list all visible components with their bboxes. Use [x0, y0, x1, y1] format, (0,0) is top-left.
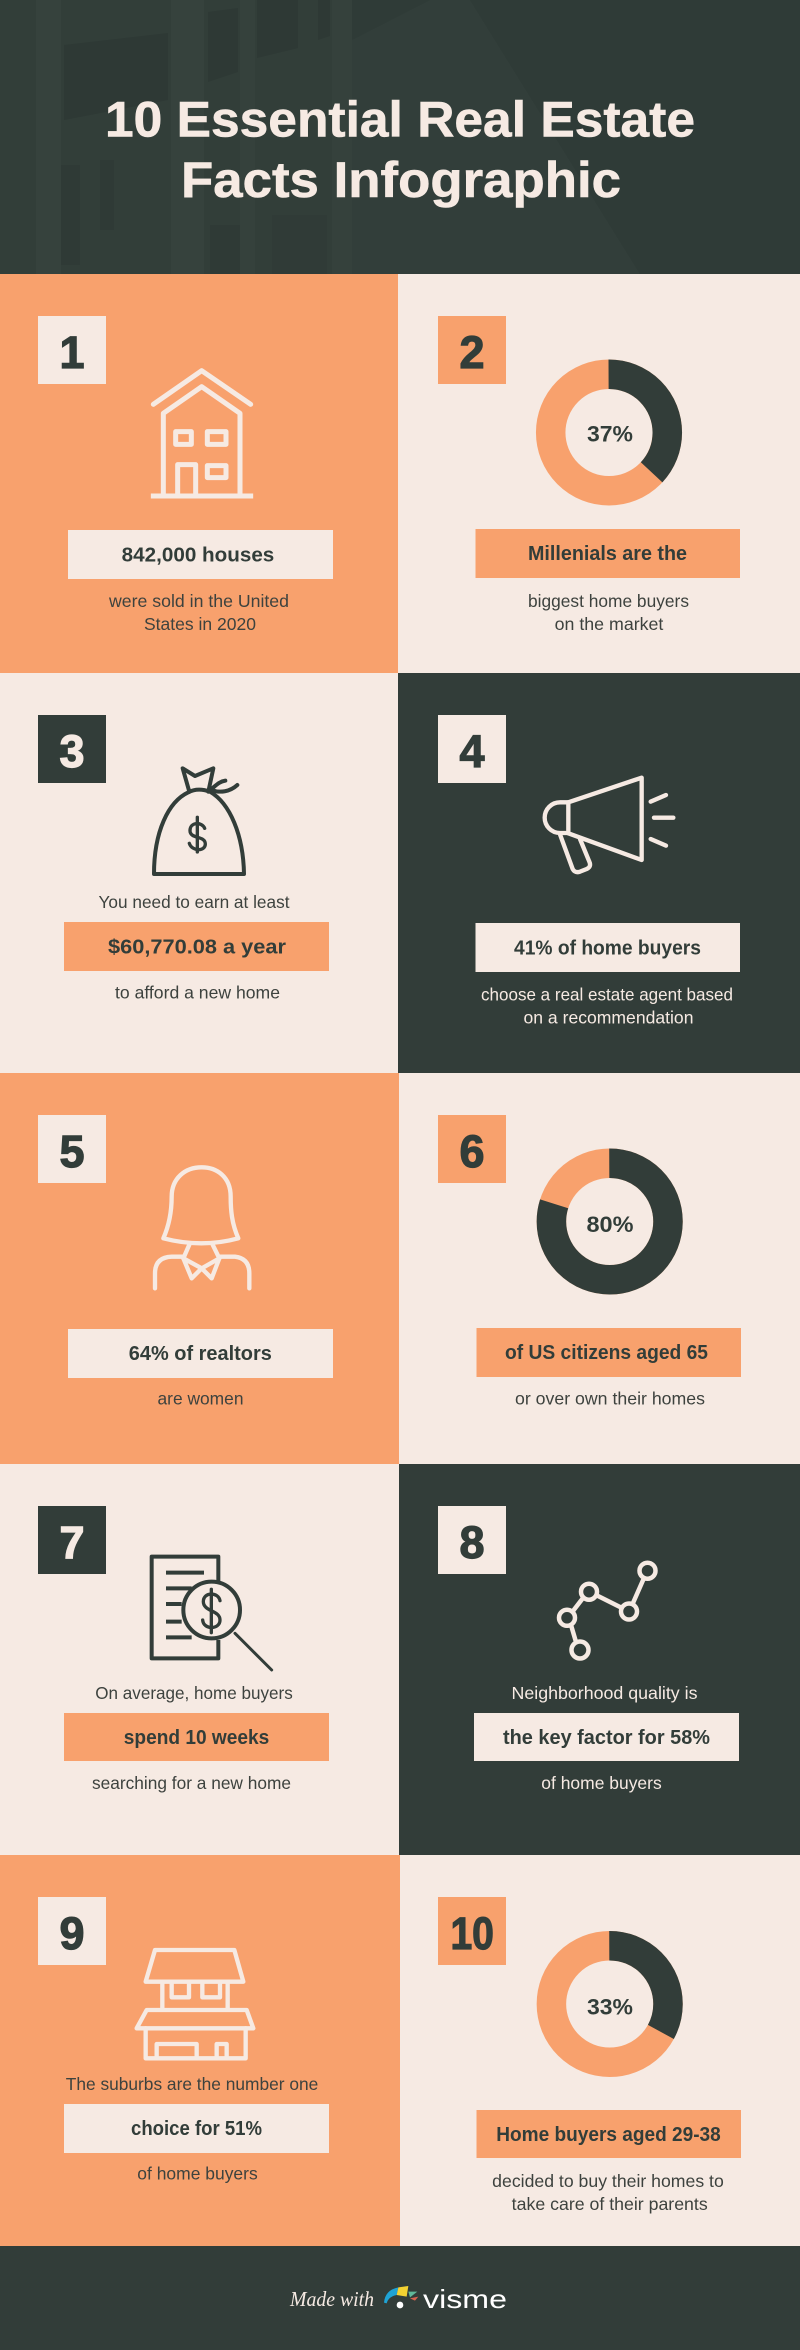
description: on the market: [555, 614, 663, 634]
description: [528, 591, 689, 634]
label: [476, 529, 740, 578]
number 5: 5: [59, 1126, 85, 1177]
donut chart 37%: [551, 374, 667, 491]
description: [481, 985, 733, 1028]
number 2: 2: [459, 327, 485, 378]
label: [476, 2110, 741, 2158]
panel 2: millennials: [398, 274, 800, 673]
label: choice for 51%: [131, 2118, 262, 2140]
icon: suburban house: [137, 1950, 253, 2058]
intro text: Neighborhood quality is: [512, 1683, 698, 1703]
label: of US citizens aged 65: [505, 1342, 708, 1364]
number 10: [438, 1897, 506, 1965]
panel 3: income needed: [0, 673, 398, 1073]
label: [476, 1328, 741, 1377]
number 1: [38, 316, 106, 384]
description: are women: [158, 1389, 244, 1409]
label: the key factor for 58%: [503, 1727, 710, 1749]
description: biggest home buyers: [528, 591, 689, 611]
description: to afford a new home: [115, 983, 280, 1003]
icon: visme logo: [384, 2286, 418, 2308]
icon: money bag: [154, 768, 244, 874]
number 5: [38, 1115, 106, 1183]
number 6: 6: [459, 1126, 485, 1177]
panel 1: houses sold: [0, 274, 398, 673]
description: or over own their homes: [515, 1389, 705, 1409]
label: [474, 1713, 739, 1761]
description: take care of their parents: [512, 2194, 708, 2214]
number 7: 7: [59, 1517, 85, 1568]
panel 10: caring for parents: [400, 1855, 800, 2246]
description: [492, 2171, 724, 2214]
number 6: [438, 1115, 506, 1183]
description: searching for a new home: [92, 1773, 291, 1793]
label: spend 10 weeks: [124, 1727, 269, 1749]
label: [64, 922, 329, 971]
panel 7: search time: [0, 1464, 399, 1855]
donut chart 80%: [551, 1163, 668, 1280]
label: $60,770.08 a year: [108, 937, 286, 959]
number 4: 4: [459, 726, 485, 777]
label: Home buyers aged 29-38: [496, 2124, 721, 2146]
number 3: [38, 715, 106, 783]
donut chart 37%: 37%: [587, 422, 633, 446]
icon: house: [153, 371, 251, 496]
number 7: [38, 1506, 106, 1574]
label: 842,000 houses: [122, 544, 274, 566]
header panel: [0, 0, 800, 274]
description: States in 2020: [144, 614, 256, 634]
number 10: 10: [450, 1908, 494, 1959]
number 9: 9: [59, 1908, 85, 1959]
description: decided to buy their homes to: [492, 2171, 724, 2191]
label: Millenials are the: [528, 543, 687, 565]
donut chart 80%: 80%: [586, 1212, 634, 1237]
label: [64, 1713, 329, 1761]
intro text: You need to earn at least: [98, 892, 290, 912]
icon: woman: [155, 1167, 249, 1288]
description: of home buyers: [541, 1773, 662, 1793]
title: 10 Essential Real Estate: [105, 92, 695, 148]
footer: [0, 2246, 800, 2350]
number 1: 1: [59, 327, 85, 378]
donut chart 33%: [551, 1946, 668, 2062]
label: 41% of home buyers: [514, 938, 701, 960]
title: Facts Infographic: [181, 152, 621, 208]
panel 5: realtors: [0, 1073, 399, 1464]
panel 8: neighborhood quality: [399, 1464, 800, 1855]
number 4: [438, 715, 506, 783]
description: choose a real estate agent based: [481, 985, 733, 1005]
description: on a recommendation: [524, 1008, 694, 1028]
description: were sold in the United: [108, 591, 289, 611]
icon: document and magnifier: [152, 1557, 272, 1670]
number 8: 8: [459, 1517, 485, 1568]
number 3: 3: [59, 726, 85, 777]
number 8: [438, 1506, 506, 1574]
made with text: Made with: [289, 2287, 374, 2311]
number 2: [438, 316, 506, 384]
number 9: [38, 1897, 106, 1965]
intro text: The suburbs are the number one: [66, 2074, 318, 2094]
icon: connected nodes: [559, 1563, 656, 1658]
panel 9: suburbs: [0, 1855, 400, 2246]
donut chart 33%: 33%: [587, 1994, 633, 2020]
icon: megaphone: [545, 778, 673, 872]
intro text: On average, home buyers: [95, 1683, 293, 1703]
panel 4: agent recommendation: [398, 673, 800, 1073]
label: [476, 923, 740, 972]
label: 64% of realtors: [129, 1343, 272, 1365]
label: [68, 1329, 333, 1378]
panel 6: older homeowners: [399, 1073, 800, 1464]
visme wordmark: visme: [423, 2284, 507, 2314]
description: [108, 591, 289, 634]
title: [105, 92, 695, 208]
label: [64, 2104, 329, 2153]
description: of home buyers: [137, 2164, 258, 2184]
label: [68, 530, 333, 579]
